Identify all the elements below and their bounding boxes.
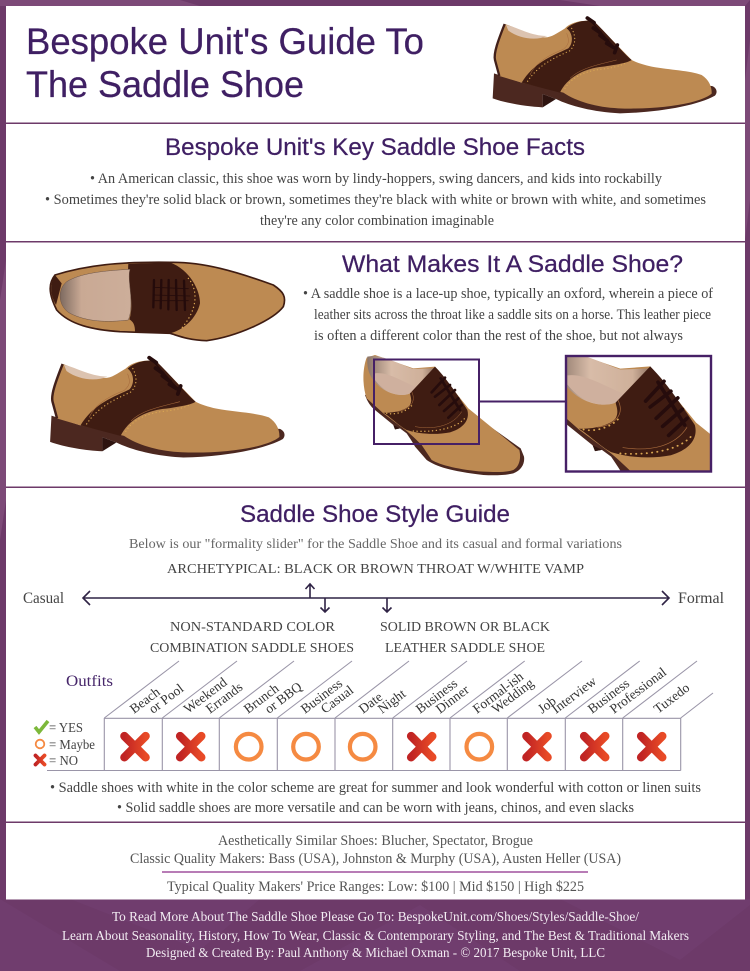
text: slider intro: Below is our "formality slider" for the Saddle Shoe and its casual and formal variations — [129, 537, 622, 552]
legend: = YES — [49, 720, 83, 735]
outfit column labels — [127, 664, 693, 716]
label: non-standard colors: COMBINATION SADDLE SHOES — [150, 641, 354, 656]
heading: what makes it a saddle shoe: What Makes It A Saddle Shoe? — [342, 251, 683, 278]
title: Bespoke Unit's Guide To — [26, 21, 424, 62]
outfit column labels: Business — [585, 676, 632, 716]
outfit column labels: Business — [413, 676, 460, 716]
outfit ratings — [124, 734, 662, 760]
outfit column labels: Tuxedo — [651, 680, 693, 716]
text block: style notes: • Saddle shoes with white in the color scheme are great for summer and look wonderful with cotton or linen suits — [50, 780, 701, 796]
outfit column labels: Date — [356, 689, 385, 716]
text block: similar shoes and makers — [130, 833, 621, 867]
outfit column labels: or Pool — [146, 681, 186, 716]
text block: style notes: • Solid saddle shoes are more versatile and can be worn with jeans, chinos, and even slacks — [117, 800, 634, 816]
text block: style notes — [50, 780, 701, 816]
text block: key facts: • An American classic, this shoe was worn by lindy-hoppers, swing dancers, and kids into rockabilly — [90, 171, 662, 187]
outfit column labels: Interview — [549, 673, 599, 716]
text block: definition: • A saddle shoe is a lace-up shoe, typically an oxford, wherein a piece of — [303, 286, 713, 302]
outfit column labels: Dinner — [433, 682, 472, 716]
outfit table grid — [47, 661, 713, 770]
legend: = NO — [49, 753, 78, 768]
outfit column labels: Weekend — [181, 674, 230, 716]
illustration: top view shoe — [50, 262, 285, 341]
text block: definition: is often a different color than the rest of the shoe, but not always — [314, 328, 683, 344]
outfit column labels: Beach — [127, 684, 163, 716]
text block: key facts — [45, 171, 706, 229]
footer: Designed & Created By: Paul Anthony & Michael Oxman - © 2017 Bespoke Unit, LLC — [146, 946, 605, 961]
text block: similar shoes and makers: Aesthetically Similar Shoes: Blucher, Spectator, Brogue — [218, 833, 533, 849]
text: price ranges: Typical Quality Makers' Price Ranges: Low: $100 | Mid $150 | High $225 — [167, 879, 584, 895]
label: solid leather: LEATHER SADDLE SHOE — [385, 641, 545, 656]
text block: key facts: • Sometimes they're solid black or brown, sometimes they're black with white or brown with white, and sometimes — [45, 192, 706, 208]
heading: outfits: Outfits — [66, 673, 113, 690]
footer: To Read More About The Saddle Shoe Please Go To: BespokeUnit.com/Shoes/Styles/Saddle-Shoe/ — [112, 910, 639, 925]
title — [26, 21, 424, 105]
label: archetypical: ARCHETYPICAL: BLACK OR BROWN THROAT W/WHITE VAMP — [167, 562, 584, 577]
label: non-standard colors: NON-STANDARD COLOR — [170, 620, 336, 635]
outfit column labels: Wedding — [489, 675, 537, 716]
outfit column labels: Professional — [607, 664, 669, 716]
outfit column labels: Job — [535, 693, 559, 716]
illustration: angled shoe with highlight box — [363, 355, 566, 475]
footer — [62, 910, 689, 961]
text block: definition: leather sits across the throat like a saddle sits on a horse. This leather piece — [314, 307, 711, 323]
label: non-standard colors — [150, 620, 354, 656]
label: solid leather: SOLID BROWN OR BLACK — [380, 620, 550, 635]
footer: Learn About Seasonality, History, How To Wear, Classic & Contemporary Styling, and The Best & Traditional Makers — [62, 929, 689, 944]
text block: key facts: they're any color combination imaginable — [260, 213, 494, 229]
outfit column labels: Night — [375, 686, 409, 716]
outfit column labels: Business — [298, 676, 345, 716]
legend: = Maybe — [49, 737, 95, 752]
label: formal: Formal — [678, 590, 724, 607]
outfit column labels: Errands — [203, 679, 245, 716]
heading: style guide: Saddle Shoe Style Guide — [240, 501, 510, 528]
legend — [35, 720, 95, 768]
illustration: header saddle shoe — [493, 18, 717, 113]
label: casual: Casual — [23, 590, 64, 607]
formality slider arrow — [83, 584, 669, 612]
outfit column labels: Brunch — [241, 680, 282, 716]
outfit column labels: or BBQ — [262, 679, 305, 716]
illustration: magnified saddle detail — [564, 354, 712, 473]
outfit column labels: Casual — [318, 682, 356, 716]
outfit column labels: Formal-ish — [470, 669, 526, 716]
title: The Saddle Shoe — [26, 64, 304, 105]
illustration: side view shoe — [50, 358, 285, 458]
text block: definition — [303, 286, 713, 344]
text block: similar shoes and makers: Classic Quality Makers: Bass (USA), Johnston & Murphy (USA), Austen Heller (USA) — [130, 851, 621, 867]
heading: key facts: Bespoke Unit's Key Saddle Shoe Facts — [165, 134, 585, 161]
label: solid leather — [380, 620, 550, 656]
